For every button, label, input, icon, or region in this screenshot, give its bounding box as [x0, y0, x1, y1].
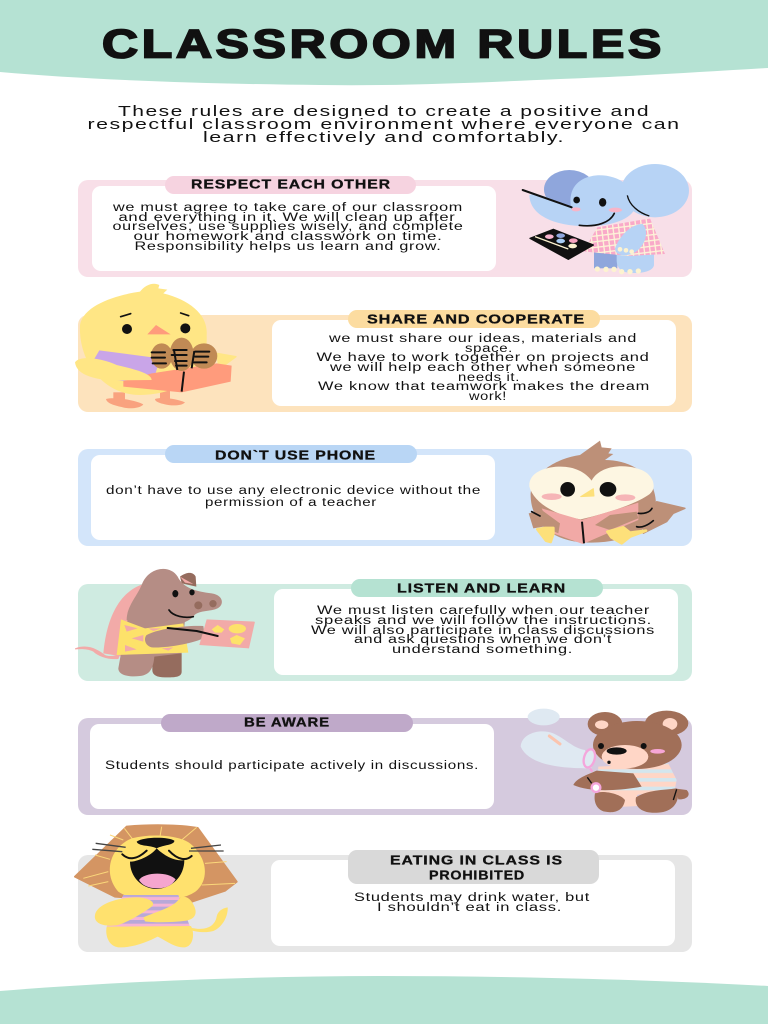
text: respect each other: ourselves, use supplies wisely, and complete — [112, 221, 464, 233]
text: eating in class: I shouldn’t eat in class. — [377, 902, 562, 914]
heading pill: be aware: BE AWARE — [244, 716, 330, 730]
heading pill: share and cooperate: SHARE AND COOPERATE — [367, 312, 585, 326]
text: listen and learn: understand something. — [392, 644, 573, 656]
text: respect each other: our homework and classwork on time. — [134, 231, 442, 243]
text: share and cooperate — [316, 333, 650, 403]
text: share and cooperate: we will help each other when someone — [329, 362, 636, 374]
text: eating in class — [354, 892, 590, 914]
heading pill: don't use phone: DON`T USE PHONE — [215, 448, 376, 462]
heading pill: don't use phone — [165, 445, 417, 463]
text: respect each other — [112, 202, 464, 253]
intro text: These rules are designed to create a positive and — [118, 104, 650, 120]
text: respect each other: Responsibility helps us learn and grow. — [134, 241, 442, 253]
intro text: learn effectively and comfortably. — [203, 130, 565, 146]
text: don't use phone — [106, 485, 481, 509]
text: listen and learn — [311, 605, 655, 656]
icon: hippo — [75, 569, 255, 677]
heading pill: eating in class: EATING IN CLASS IS — [390, 854, 563, 868]
heading pill: respect each other: RESPECT EACH OTHER — [191, 178, 391, 192]
text: share and cooperate: we must share our ideas, materials and — [328, 333, 637, 345]
heading pill: respect each other — [165, 176, 416, 194]
icon: bear — [521, 709, 689, 813]
icon: lion — [75, 825, 237, 947]
panel: don't use phone — [78, 441, 692, 546]
heading pill: listen and learn: LISTEN AND LEARN — [397, 582, 566, 596]
icon: chick — [75, 284, 236, 408]
heading pill: eating in class: PROHIBITED — [429, 868, 525, 882]
heading pill: listen and learn — [351, 579, 603, 597]
text: share and cooperate: needs it. — [458, 372, 520, 384]
text: listen and learn: We must listen carefully when our teacher — [317, 605, 650, 617]
text: share and cooperate: space. — [465, 343, 513, 355]
text: listen and learn: and ask questions when we don’t — [354, 634, 612, 646]
heading pill: be aware — [161, 714, 413, 732]
text: listen and learn: We will also participate in class discussions — [311, 625, 655, 637]
text: eating in class: Students may drink water, but — [354, 892, 590, 904]
header band — [0, 0, 768, 85]
text: don't use phone: don’t have to use any electronic device without the — [106, 485, 481, 497]
text: don't use phone: permission of a teacher — [205, 497, 377, 509]
panel: listen and learn — [75, 569, 692, 681]
panel: eating in class is prohibited — [75, 825, 692, 952]
text: share and cooperate: We know that teamwork makes the dream — [318, 381, 650, 393]
text: share and cooperate: We have to work together on projects and — [316, 352, 650, 364]
intro text: respectful classroom environment where everyone can — [88, 117, 680, 133]
panel: share and cooperate — [75, 284, 692, 412]
text: listen and learn: speaks and we will follow the instructions. — [315, 615, 652, 627]
heading pill: eating in class — [348, 850, 599, 884]
title: CLASSROOM RULES — [102, 22, 665, 66]
text: respect each other: and everything in it. We will clean up after — [118, 212, 456, 224]
text: respect each other: we must agree to take care of our classroom — [112, 202, 463, 214]
heading pill: share and cooperate — [348, 310, 600, 328]
panel: be aware — [78, 709, 692, 815]
icon: owl — [529, 441, 685, 544]
text: be aware: Students should participate actively in discussions. — [105, 760, 479, 772]
panel: respect each other — [78, 164, 692, 277]
footer band — [0, 976, 768, 1024]
text: share and cooperate: work! — [468, 391, 507, 403]
intro text — [88, 104, 680, 146]
icon: elephant — [523, 164, 689, 274]
